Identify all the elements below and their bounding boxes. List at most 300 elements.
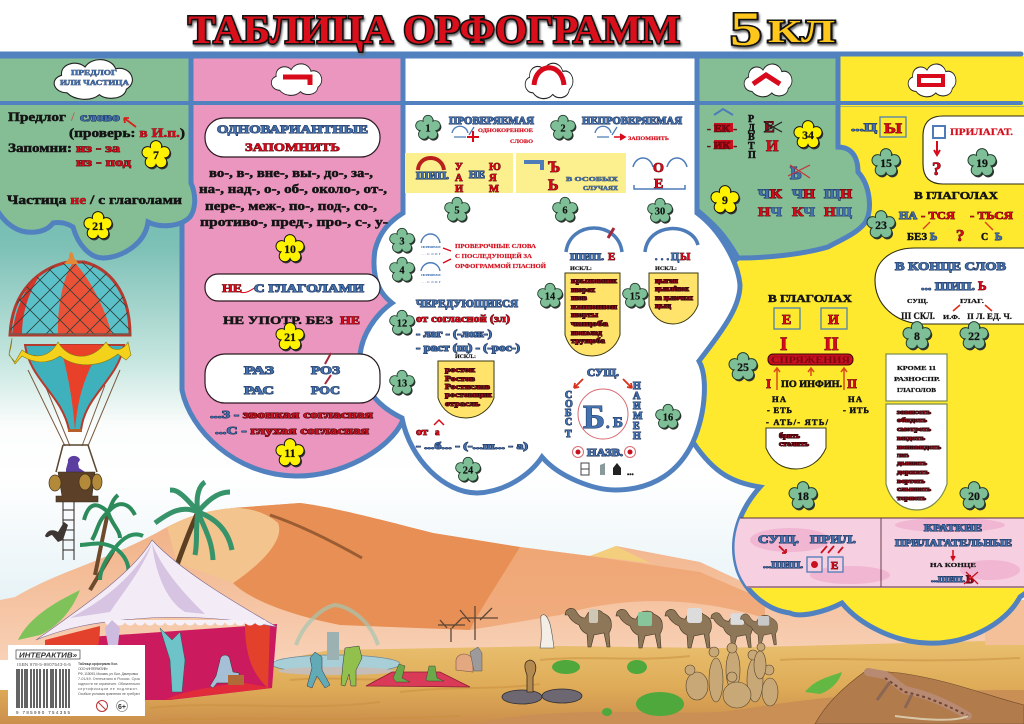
- proper vertical label: Б: [565, 408, 572, 419]
- infinitive row: II: [847, 376, 857, 391]
- lower sand shadow: [470, 690, 1024, 724]
- dune wash: [470, 547, 765, 630]
- yellow box: vowels after hissing: И: [455, 184, 463, 195]
- badge 6: [553, 197, 578, 223]
- exception shield 14: [565, 273, 620, 356]
- noun arrows: [574, 379, 632, 388]
- tsya row: - ТЬСЯ: [970, 210, 1013, 222]
- balloon ropes: [28, 370, 120, 446]
- adjective box: [923, 116, 1024, 184]
- badge 24: 24: [463, 466, 474, 477]
- yellow box: separators: СЛУЧАЯХ: [583, 185, 618, 192]
- small icons row: ...: [627, 467, 634, 477]
- check word scheme 3: ...СЛОГ: [421, 252, 442, 256]
- noun and verb labels: [901, 298, 1012, 321]
- sand: [0, 640, 1024, 724]
- verbs heading: В ГЛАГОЛАХ: [914, 191, 999, 202]
- noun and adjective labels: СУЩ.: [758, 532, 799, 546]
- panel: pink column: [182, 56, 403, 476]
- hissing o arc: ШИП.: [570, 253, 604, 263]
- palm tree centre: [155, 482, 232, 565]
- publisher info: 7-01/49. Отпечатано в России. Срок: [78, 677, 140, 681]
- noun and verb labels: СУЩ.: [907, 298, 928, 305]
- desert landscape: [0, 482, 1024, 724]
- publisher info: годности не ограничен. Обязательно: [78, 682, 140, 686]
- tsya row: - ТСЯ: [921, 210, 955, 222]
- panel: yellow column: [690, 104, 1024, 643]
- word end box: [875, 248, 1024, 324]
- prefix list: [199, 165, 388, 229]
- balloonist: [66, 456, 85, 475]
- first conjugation endings: - ЕТЬ: [767, 405, 792, 415]
- badge 6: 6: [562, 206, 568, 217]
- chk pairs: ЧК: [758, 186, 783, 201]
- badge 23: [867, 211, 896, 239]
- roof shadows: [70, 543, 205, 618]
- short adjectives: Ь: [966, 572, 974, 586]
- badge 22: [960, 322, 989, 350]
- e box: Е: [782, 313, 791, 328]
- safety icon: [96, 700, 108, 712]
- shield 18: [766, 428, 826, 469]
- publisher info: ООО «ИНТЕРАКТИВ»: [78, 667, 108, 671]
- separator: /: [70, 109, 75, 124]
- small icons row: [581, 463, 634, 477]
- panel: white cloud column: [360, 56, 740, 493]
- badge 10: [276, 235, 305, 263]
- camel two: [616, 609, 662, 648]
- tent walls: [45, 624, 277, 700]
- camel four: [711, 613, 752, 647]
- hissing soft sign: [921, 278, 987, 293]
- swag band: [9, 333, 131, 335]
- badge 30: 30: [655, 207, 665, 218]
- exception shield 14: капюшон: [571, 303, 617, 311]
- lower sky: [0, 476, 1024, 606]
- heading: alternating: ЧЕРЕДУЮЩИЕСЯ: [416, 299, 519, 310]
- proper vertical label: [565, 390, 573, 440]
- letter e crossed: Е: [764, 119, 775, 136]
- badge 3: [390, 228, 415, 254]
- meerkats: [685, 643, 778, 708]
- header cloud: preposition or particle: [54, 60, 132, 99]
- badge 3: 3: [399, 237, 405, 248]
- prefix pairs: РОС: [311, 383, 340, 397]
- badge 11: [276, 439, 305, 467]
- exception shield 14: крыжовник: [571, 277, 618, 285]
- infinitive row: [766, 376, 857, 391]
- badge 2: 2: [560, 124, 566, 135]
- alternating rules: - раст (щ) - (-рос-): [416, 343, 520, 354]
- exception shield 13: Ростислав: [445, 382, 490, 391]
- badge 34: [794, 121, 823, 149]
- exception shield 14: трущоба: [571, 337, 606, 345]
- badge 8: [903, 322, 932, 350]
- alternating rules: [416, 314, 520, 360]
- letter i: И: [766, 138, 779, 155]
- i box: И: [828, 313, 839, 328]
- prefix pairs: РАС: [244, 383, 274, 397]
- publisher info: Таблица орфограмм 5 кл.: [78, 662, 118, 666]
- noun and verb labels: И.Ф.: [943, 314, 960, 321]
- yellow box: vowels after hissing: М: [489, 184, 499, 195]
- barcode digits: 9 785990 754355: [16, 710, 70, 715]
- yellow box: vowels after hissing: ШИП.: [416, 171, 450, 182]
- yellow box: vowels after hissing: [405, 153, 513, 195]
- badge 13: [390, 370, 415, 396]
- badge 21: [84, 212, 113, 240]
- box: raz ros: [205, 354, 380, 403]
- cases vertical: П: [748, 150, 756, 161]
- badge 22: 22: [968, 329, 980, 343]
- monkey: [45, 522, 68, 542]
- heading: unchecked vowel: НЕПРОВЕРЯЕМАЯ: [582, 116, 682, 127]
- blue word: слово: [80, 110, 120, 124]
- roman numerals: I: [780, 334, 787, 355]
- exception note: РАЗНОСПР.: [894, 377, 941, 383]
- badge 12: [390, 310, 415, 336]
- hissing soft sign: ... ШИП.: [921, 279, 975, 293]
- prefix pairs: РАЗ: [244, 363, 274, 377]
- badge 25: 25: [737, 360, 749, 374]
- dunes: [0, 503, 1024, 660]
- red arrows: [443, 248, 451, 263]
- suffix ik: - ИК -: [707, 141, 737, 152]
- snake: [502, 660, 582, 704]
- publisher info: [78, 662, 140, 696]
- check hint: (проверь: в И.п. ): [69, 125, 185, 140]
- basket ring: [56, 445, 97, 472]
- cases vertical: Д: [748, 123, 755, 134]
- names row: [572, 446, 636, 459]
- check word scheme 4: ...СЛОГ: [421, 280, 442, 284]
- plus mark: [467, 131, 479, 142]
- badge 16: 16: [663, 413, 673, 424]
- hissing o arc: ИСКЛ.:: [570, 266, 592, 272]
- check word note: [455, 243, 546, 270]
- badge 18: [789, 482, 818, 510]
- small house and man: [456, 647, 482, 672]
- not with verbs label: НЕ: [222, 281, 242, 295]
- proper vertical label: Т: [565, 429, 572, 440]
- badge 21 verbs: 21: [284, 330, 296, 344]
- sand texture: [150, 656, 1020, 720]
- badge 25: [729, 353, 758, 381]
- noun heading: СУЩ.: [587, 368, 619, 379]
- badge 2: [551, 115, 576, 141]
- dress: [105, 620, 120, 645]
- noun and adjective labels: [758, 532, 856, 572]
- check word scheme 4: [421, 263, 442, 284]
- badge 21 verbs: [276, 323, 305, 351]
- camels: [565, 608, 611, 647]
- common vertical label: М: [633, 411, 643, 422]
- fountain figures: [307, 646, 362, 688]
- badge 19: 19: [976, 156, 988, 170]
- tsy arc: ИСКЛ.:: [655, 266, 677, 272]
- exception shield 15: цыц: [655, 302, 671, 310]
- alternating o with stress: [416, 420, 444, 438]
- yellow box: vowels after hissing: Ю: [489, 162, 501, 173]
- badge 14: 14: [545, 292, 556, 303]
- names row: НАЗВ.: [587, 448, 624, 459]
- not with verbs label: С ГЛАГОЛАМИ: [254, 281, 365, 295]
- unchecked icon: [595, 126, 617, 137]
- soft sign crossed: Ь: [790, 163, 802, 183]
- badge 24: [456, 457, 481, 483]
- right desert dune: [985, 600, 1024, 645]
- heading: remember: ЗАПОМНИТЬ: [245, 140, 340, 154]
- orange dune slope: [233, 503, 520, 630]
- shield 20: видеть: [897, 435, 926, 442]
- related word label: ОДНОКОРЕННОЕ: [478, 128, 533, 134]
- prefix list: во-, в-, вне-, вы-, до-, за-,: [209, 165, 373, 180]
- badge 5: 5: [454, 206, 460, 217]
- badge 15 root: [623, 283, 648, 309]
- seated man: [210, 655, 239, 688]
- badge 1: [416, 115, 441, 141]
- tent red floor: [165, 682, 272, 700]
- check word note: ПРОВЕРОЧНЫЕ СЛОВА: [455, 243, 536, 250]
- common vertical label: Н: [633, 381, 641, 392]
- noun and adjective labels: Е: [831, 560, 838, 572]
- short adjectives: ПРИЛАГАТЕЛЬНЫЕ: [895, 539, 1012, 549]
- hissing o arc: Е: [608, 251, 615, 263]
- alternating rules: ИСКЛ.:: [455, 354, 476, 360]
- tsy arc: Ы: [680, 252, 691, 263]
- grade number: 5: [730, 3, 762, 56]
- panel: green right column: [697, 56, 869, 258]
- tsya row: С: [981, 232, 988, 243]
- hissing o arc: [566, 228, 622, 272]
- badge 34: 34: [802, 128, 814, 142]
- alternating formula: - ...б... - (-...ш... - а): [416, 441, 528, 452]
- sand bags: [49, 474, 102, 491]
- voiceless rule: ...С - глухая согласная: [215, 425, 369, 437]
- badge 23: 23: [875, 218, 887, 232]
- exception shield 13: росток: [445, 365, 476, 374]
- remember label: Запомни:: [8, 140, 72, 155]
- badge 18: 18: [797, 489, 809, 503]
- hissing soft sign: Ь: [978, 278, 987, 293]
- badge 21: 21: [92, 219, 104, 233]
- chk pairs: НЩ: [824, 204, 853, 219]
- particle rule: Частица не / с глаголами: [7, 192, 183, 207]
- barcode sticker: [8, 645, 145, 716]
- lower envelope: [25, 345, 124, 430]
- exception note: ГЛАГОЛОВ: [897, 388, 936, 394]
- chk pairs: [758, 186, 853, 219]
- noun and verb labels: ГЛАГ.: [960, 298, 984, 305]
- conjugation heading: В ГЛАГОЛАХ: [768, 294, 853, 305]
- shield 20: гнать: [897, 452, 909, 459]
- o e alternation scheme: Е: [654, 177, 663, 192]
- common vertical label: И: [633, 401, 641, 412]
- alternating rules: от согласной (зл): [416, 314, 510, 325]
- header cloud: ending chevron: [744, 64, 792, 97]
- tent valance: [105, 620, 265, 625]
- shield 20: смотреть: [897, 426, 932, 433]
- exception shield 15: цыган: [655, 277, 678, 285]
- suffix ek: - ЕК -: [707, 124, 737, 135]
- dune ridge shadow: [270, 515, 362, 558]
- badge 13: 13: [397, 379, 407, 390]
- camel five: [740, 614, 778, 645]
- alternating o with stress: от: [416, 427, 428, 438]
- pink bottom strip: [725, 518, 1024, 588]
- badge 11: 11: [284, 446, 296, 460]
- header rule: [0, 101, 1021, 105]
- yellow box: separators: В ОСОБЫХ: [566, 176, 618, 183]
- second conjugation endings: - ИТЬ: [843, 405, 869, 415]
- exception shield 13: Ростов: [445, 374, 475, 383]
- i box: [821, 308, 847, 329]
- badge 20: 20: [968, 489, 980, 503]
- shield 20: держать: [897, 469, 930, 476]
- people on carpet: [393, 664, 444, 682]
- fountain: [272, 605, 400, 675]
- exception shield 14: шорты: [571, 311, 599, 319]
- question mark: ?: [932, 159, 942, 180]
- basket: [56, 472, 98, 502]
- palm tree low: [80, 534, 143, 590]
- shield 20: дышать: [897, 460, 928, 467]
- prefix pairs: РОЗ: [311, 363, 340, 377]
- roman numerals: [780, 334, 839, 355]
- proper vertical label: С: [565, 390, 572, 401]
- remember words 1: из - за: [76, 141, 120, 155]
- badge 9: 9: [722, 193, 728, 207]
- heading: checked vowel: ПРОВЕРЯЕМАЯ: [449, 116, 534, 127]
- short adjectives: КРАТКИЕ: [924, 524, 982, 534]
- tsy ending: ...Ц: [851, 120, 878, 134]
- tsya row: БЕЗ: [907, 232, 927, 243]
- prefix list: на-, над-, о-, об-, около-, от-,: [199, 181, 387, 196]
- exception shield 15: цыплёнок: [655, 285, 690, 293]
- yellow box: separators: Ь: [548, 177, 559, 194]
- acacia trees: [438, 606, 498, 642]
- palm tree left: [84, 495, 135, 575]
- yellow box: separators: Ъ: [548, 159, 560, 176]
- chk pairs: НЧ: [758, 204, 783, 219]
- isbn: ISBN 978-5-9907543-5-5: [17, 662, 72, 667]
- adjective square: [933, 126, 945, 138]
- header cloud: root mark: [525, 63, 573, 99]
- second conjugation endings: [843, 394, 869, 415]
- tsya row: Ь: [995, 231, 1002, 243]
- panel content: roots: [405, 116, 698, 477]
- e box: [774, 308, 800, 329]
- chk pairs: ЩН: [824, 186, 852, 201]
- grade label: КЛ: [768, 13, 835, 49]
- exception shield 14: шоколад: [571, 329, 603, 337]
- exception shield 13: [438, 361, 494, 418]
- infinitive row: I: [766, 376, 771, 391]
- lizard: [868, 672, 968, 720]
- noun circle: Б: [583, 399, 605, 436]
- remember label: ЗАПОМНИТЬ: [628, 136, 669, 142]
- shield 20: ненавидеть: [897, 444, 942, 451]
- camel caravan: [540, 608, 778, 648]
- exception note: КРОМЕ 11: [897, 366, 936, 372]
- sky gradient: [0, 56, 1024, 476]
- tent roof: [36, 540, 277, 640]
- check word scheme 4: ПРОВЕРЯЕМОЕ: [421, 273, 442, 277]
- yellow box: vowels after hissing: НЕ: [469, 170, 485, 181]
- shield 18: брить: [779, 432, 800, 440]
- panel content: prefixes: [199, 118, 388, 437]
- common vertical label: А: [633, 391, 641, 402]
- badge 15 ending: 15: [880, 156, 892, 170]
- carpet: [366, 672, 470, 687]
- rope ladder: [63, 502, 74, 560]
- noun circle: .: [606, 417, 610, 432]
- shield 20: слышать: [897, 486, 932, 493]
- exception note: [886, 354, 947, 401]
- noun circle: [578, 389, 628, 439]
- publisher logo: ИНТЕРАКТИВ»: [19, 652, 77, 660]
- badge 4: 4: [399, 266, 405, 277]
- camel three: [665, 608, 711, 648]
- infinitive row: ПО ИНФИН.: [781, 379, 842, 389]
- rock: [815, 670, 1024, 724]
- chk pairs: КЧ: [792, 204, 816, 219]
- badge 30: [648, 198, 673, 224]
- badge 5: [445, 197, 470, 223]
- prefix list: противо-, пред-, про-, с-, у-: [200, 214, 388, 229]
- badge 20: [960, 482, 989, 510]
- lit dune face: [167, 508, 279, 583]
- shield 20: вертеть: [897, 478, 926, 485]
- o e alternation scheme: [633, 158, 687, 192]
- panel content: preposition rules: [7, 109, 185, 207]
- shield 20: терпеть: [897, 495, 927, 502]
- box: not with verbs: [205, 274, 380, 301]
- exception shield 14: шов: [571, 294, 587, 302]
- tsya row: Ь: [930, 231, 937, 243]
- exception shield 15: [649, 273, 698, 324]
- dancer: [160, 628, 185, 692]
- alternating rules: - лаг - (-лож-): [416, 329, 492, 340]
- panel content: yellow endings column: [758, 116, 1024, 586]
- badge 8: 8: [914, 329, 920, 343]
- yellow box: vowels after hissing: А: [455, 173, 463, 184]
- panel content: green suffix column: [707, 109, 853, 219]
- noun and adjective labels: ПРИЛ.: [810, 532, 856, 546]
- green bush: [805, 672, 842, 694]
- yellow swags: [9, 338, 131, 365]
- badge 9: [711, 186, 740, 214]
- green plants: [552, 660, 684, 716]
- header cloud: preposition or particle: ПРЕДЛОГ: [71, 68, 117, 77]
- roman numerals: II: [824, 334, 839, 355]
- voiced rule: ...З - звонкая согласная: [210, 409, 373, 421]
- check word scheme 3: ПРОВЕРЯЕМОЕ: [421, 245, 442, 249]
- cases vertical: [748, 114, 756, 161]
- upper envelope: [10, 262, 130, 335]
- short adjectives: НА КОНЦЕ: [930, 562, 976, 569]
- yellow box: vowels after hissing: Я: [489, 173, 497, 184]
- soft sign crossed: [788, 163, 810, 183]
- cases vertical: В: [748, 132, 755, 143]
- check word note: ОРФОГРАММОЙ ГЛАСНОЙ: [455, 262, 546, 270]
- word label: СЛОВО: [510, 139, 534, 145]
- check word note: С ПОСЛЕДУЮЩЕЙ ЗА: [455, 252, 532, 260]
- badge 14: [538, 283, 563, 309]
- arrows up: [774, 368, 847, 390]
- caravan leader: [540, 615, 554, 648]
- panel: green left column: [0, 56, 195, 258]
